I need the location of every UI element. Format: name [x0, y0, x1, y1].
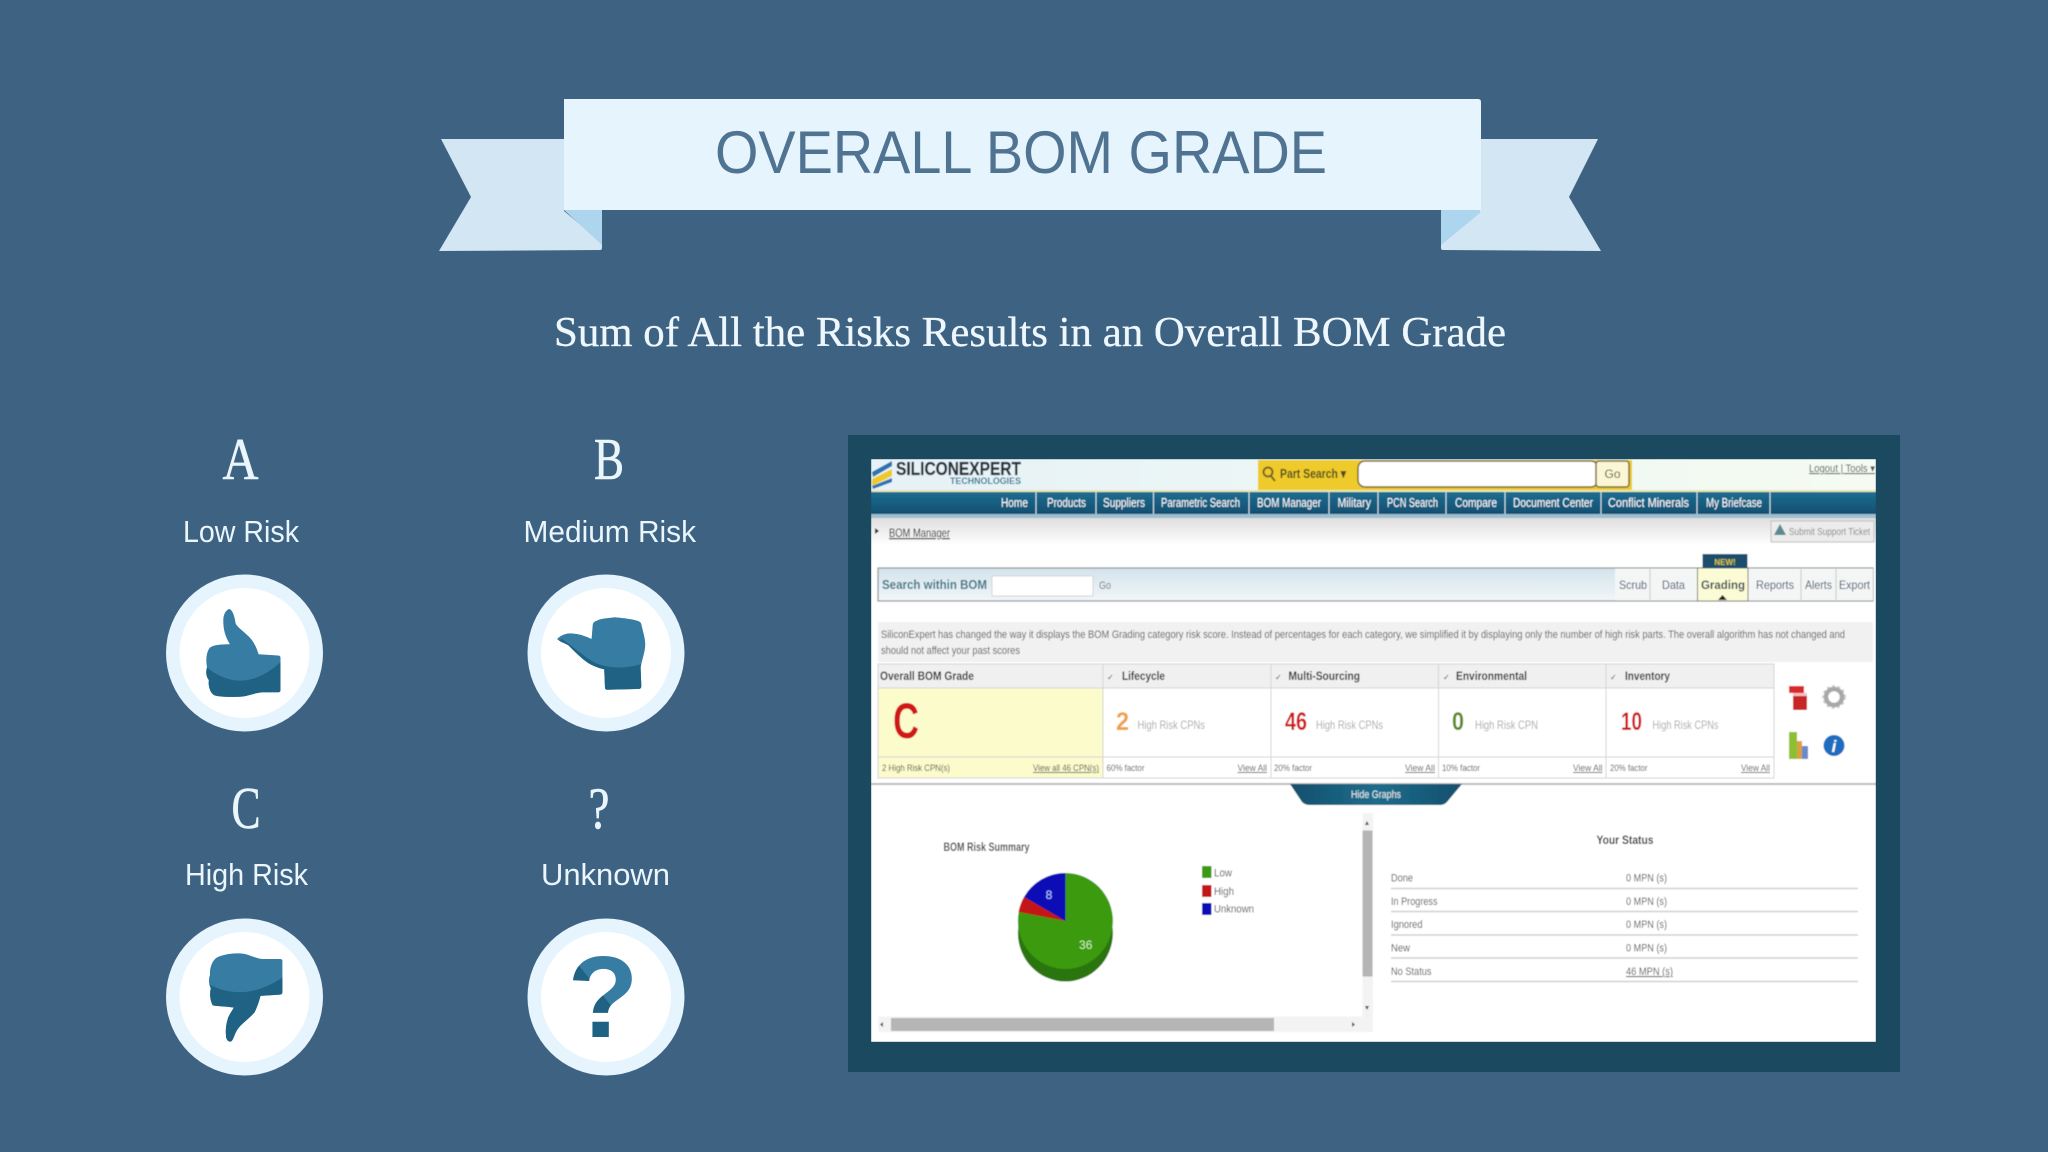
inventory cell: Inventory: [1625, 669, 1670, 683]
overall grade cell: C: [893, 693, 919, 749]
lifecycle cell: View All: [1238, 763, 1267, 773]
environmental cell: Environmental: [1456, 669, 1527, 683]
legend: [1202, 866, 1254, 916]
label high risk: High Risk: [185, 857, 308, 892]
tabs: Grading: [1701, 578, 1745, 592]
status rows: 0 MPN (s): [1626, 919, 1667, 931]
grade A: low risk: [166, 426, 323, 732]
search within BOM bar: Go: [1099, 580, 1111, 592]
part search box: Go: [1604, 467, 1621, 481]
multi-sourcing cell: [1274, 669, 1435, 773]
search within BOM bar: Search within BOM: [882, 577, 987, 592]
screenshot header: TECHNOLOGIES: [950, 476, 1021, 486]
icon: info: [1824, 735, 1844, 756]
multi-sourcing cell: 20% factor: [1274, 763, 1312, 773]
multi-sourcing cell: View All: [1405, 763, 1435, 773]
icon: thumbs up: [166, 574, 323, 732]
icon: question mark: [528, 918, 684, 1076]
tabs: Alerts: [1805, 578, 1832, 592]
notice text: should not affect your past scores: [881, 645, 1020, 657]
letter B: B: [594, 426, 624, 492]
label unknown: Unknown: [541, 857, 670, 892]
navigation bar: My Briefcase: [1706, 495, 1762, 510]
overall grade cell: [880, 669, 1099, 773]
tabs: Reports: [1756, 578, 1794, 592]
navigation bar: PCN Search: [1387, 495, 1438, 510]
environmental cell: ✓: [1443, 673, 1450, 682]
icon: pdf: [1789, 686, 1807, 710]
navigation bar: Document Center: [1513, 495, 1594, 510]
divider and hide graphs tab: Hide Graphs: [1351, 789, 1401, 801]
lifecycle cell: Lifecycle: [1122, 669, 1165, 683]
inventory cell: 20% factor: [1610, 763, 1648, 773]
overall grade cell: View all 46 CPN(s): [1033, 763, 1099, 773]
status rows: 0 MPN (s): [1626, 872, 1667, 884]
grade unknown: [528, 775, 684, 1076]
status rows: 0 MPN (s): [1626, 942, 1667, 954]
icon: gear: [1823, 686, 1845, 708]
ribbon left fold: [564, 210, 602, 245]
navigation bar: Suppliers: [1103, 495, 1145, 510]
multi-sourcing cell: 46: [1285, 708, 1307, 736]
breadcrumb row: [871, 518, 1876, 545]
tabs: NEW!: [1714, 558, 1736, 567]
icon: thumbs down: [166, 918, 323, 1076]
label medium risk: Medium Risk: [524, 514, 696, 549]
navigation bar: [871, 492, 1876, 518]
ribbon main band: [564, 99, 1481, 210]
title ribbon: [439, 99, 1601, 251]
tabs: [1615, 554, 1873, 601]
support ticket button: Submit Support Ticket: [1789, 527, 1870, 538]
label low risk: Low Risk: [183, 514, 299, 549]
logo stripes: [872, 461, 892, 489]
screenshot header: [871, 459, 1876, 492]
scrollbars: [878, 813, 1373, 1032]
status rows: Ignored: [1391, 919, 1422, 931]
letter C: C: [232, 775, 260, 841]
logout and tools links: Logout | Tools ▾: [1809, 463, 1875, 475]
lifecycle cell: High Risk CPNs: [1138, 718, 1205, 732]
inventory cell: [1610, 669, 1770, 773]
pie: 36: [1079, 938, 1093, 952]
logo text: SILICONEXPERT: [896, 459, 1021, 479]
icon: info: i: [1832, 737, 1838, 756]
pie: 8: [1046, 888, 1053, 902]
icon: bar chart: [1789, 732, 1808, 759]
inventory cell: ✓: [1610, 673, 1617, 682]
panel: screenshot frame: [848, 435, 1900, 1072]
environmental cell: 0: [1452, 708, 1464, 736]
ribbon left tail: [439, 139, 602, 251]
multi-sourcing cell: High Risk CPNs: [1316, 718, 1383, 732]
multi-sourcing cell: ✓: [1275, 673, 1282, 682]
status rows: Done: [1391, 872, 1413, 884]
pie: [1018, 873, 1113, 982]
status table: [1391, 833, 1858, 982]
breadcrumb row: BOM Manager: [889, 526, 950, 540]
tabs: Scrub: [1619, 578, 1647, 592]
overall grade cell: 2 High Risk CPN(s): [882, 763, 950, 773]
tabs: Export: [1839, 578, 1871, 592]
question mark heading: ?: [588, 775, 610, 841]
lifecycle cell: [1106, 669, 1267, 773]
environmental cell: 10% factor: [1442, 763, 1480, 773]
environmental cell: View All: [1573, 763, 1602, 773]
status rows: 46 MPN (s): [1626, 966, 1673, 978]
inventory cell: High Risk CPNs: [1652, 718, 1718, 732]
tabs: Data: [1662, 578, 1685, 592]
support ticket button: [1771, 521, 1874, 542]
legend: High: [1214, 886, 1234, 898]
grade C: high risk: [166, 775, 323, 1076]
grade B: medium risk: [524, 426, 696, 732]
ribbon right tail: [1441, 139, 1601, 251]
navigation bar: Parametric Search: [1161, 495, 1240, 510]
navigation bar: Conflict Minerals: [1608, 495, 1689, 510]
status rows: 0 MPN (s): [1626, 896, 1667, 908]
notice text: [878, 622, 1873, 662]
letter A: A: [222, 426, 259, 492]
navigation bar: BOM Manager: [1257, 495, 1321, 510]
part search box: [1258, 460, 1632, 490]
navigation bar: Military: [1338, 495, 1371, 510]
navigation bar: Compare: [1455, 495, 1497, 510]
notice text: SiliconExpert has changed the way it displays the BOM Grading category risk score. Instead of percentages for each category, we simplified it by displaying only the number of high risk parts. The overall algorithm has not changed and: [881, 629, 1845, 641]
inventory cell: View All: [1741, 763, 1770, 773]
search within BOM bar: [878, 554, 1873, 601]
environmental cell: [1442, 669, 1602, 773]
navigation bar: Products: [1047, 495, 1086, 510]
grade table: [878, 664, 1774, 778]
environmental cell: High Risk CPN: [1475, 718, 1538, 732]
navigation bar: Home: [1001, 495, 1028, 510]
title: OVERALL BOM GRADE: [715, 119, 1327, 186]
icon: sideways thumb: [528, 574, 684, 732]
multi-sourcing cell: Multi-Sourcing: [1288, 669, 1360, 683]
lifecycle cell: 60% factor: [1106, 763, 1144, 773]
status rows: In Progress: [1391, 896, 1438, 908]
lifecycle cell: 2: [1116, 708, 1129, 736]
legend: Unknown: [1214, 904, 1254, 916]
legend: Low: [1214, 868, 1232, 880]
part search box: Part Search ▾: [1280, 466, 1346, 481]
subtitle: Sum of All the Risks Results in an Overall BOM Grade: [554, 310, 1506, 356]
status rows: New: [1391, 942, 1410, 954]
pie chart: BOM risk summary: [944, 840, 1254, 982]
panel: BOM manager screenshot: [871, 459, 1876, 1042]
divider and hide graphs tab: [871, 783, 1876, 805]
status rows: [1391, 872, 1858, 982]
status heading: Your Status: [1596, 833, 1654, 847]
ribbon right fold: [1441, 210, 1480, 245]
status rows: No Status: [1391, 966, 1432, 978]
lifecycle cell: ✓: [1107, 673, 1114, 682]
overall grade cell: Overall BOM Grade: [880, 669, 974, 683]
icon: question mark: ?: [568, 932, 638, 1062]
inventory cell: 10: [1621, 708, 1642, 736]
chart title: BOM Risk Summary: [944, 840, 1030, 854]
